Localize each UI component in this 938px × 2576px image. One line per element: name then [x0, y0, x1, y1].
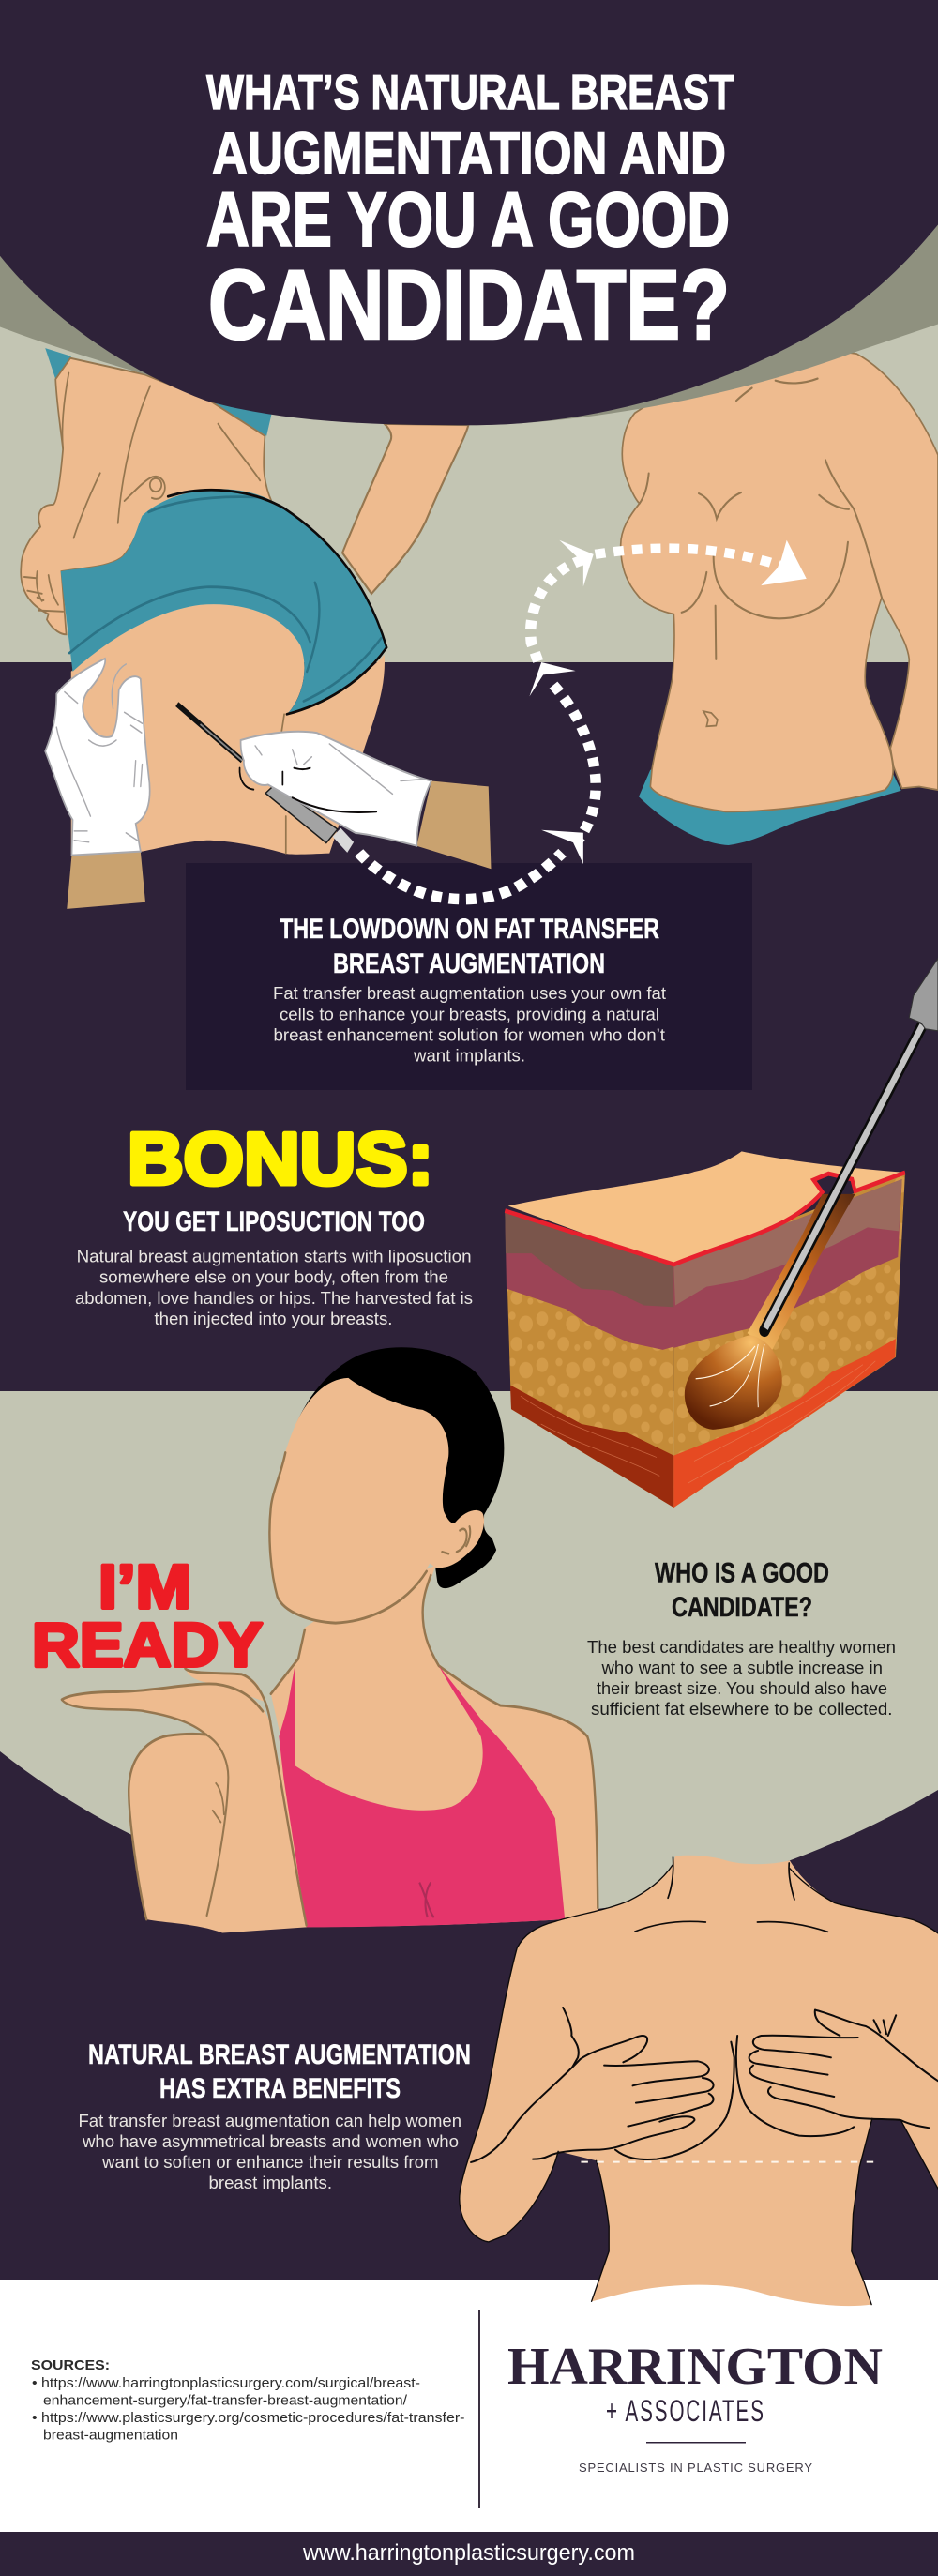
- left face dermis: [505, 1211, 675, 1307]
- heading: WHO IS A GOOD: [655, 1557, 829, 1589]
- cannula highlight: [201, 724, 242, 761]
- diagram: skin cross-section with cannula: [505, 959, 938, 1508]
- left face muscle layer: [505, 1211, 675, 1350]
- teal underwear: [61, 489, 386, 714]
- title: AUGMENTATION AND: [212, 121, 726, 187]
- pink top: [279, 1664, 565, 1927]
- dashed incision line: [581, 2159, 883, 2165]
- footer divider: [478, 2310, 480, 2508]
- body crease lines: [24, 373, 286, 854]
- title: WHAT’S NATURAL BREAST: [206, 66, 734, 120]
- body text: [79, 2112, 461, 2192]
- cannula: [177, 705, 242, 761]
- right face muscle layer: [673, 1179, 902, 1348]
- illustration: woman with pink top: [62, 1347, 598, 1933]
- background: light band with curved base: [0, 1391, 938, 1917]
- left glove: [45, 659, 150, 856]
- illustration: side figure lifting underwear: [21, 348, 491, 909]
- body text: somewhere else on your body, often from the: [99, 1268, 448, 1287]
- heading: BREAST AUGMENTATION: [333, 948, 605, 979]
- dotted segment across chest: [596, 549, 780, 566]
- title: [206, 66, 734, 360]
- hair: [292, 1347, 504, 1588]
- illustration: torso with hands: [460, 1856, 938, 2306]
- left glove wrist: [67, 852, 145, 909]
- source list: • https://www.harringtonplasticsurgery.com/surgical/breast-: [32, 2375, 420, 2391]
- white footer panel: [0, 2280, 938, 2532]
- logo name: HARRINGTON: [507, 2338, 883, 2396]
- top cleavage mark: [419, 1883, 434, 1917]
- source list: breast-augmentation: [43, 2428, 178, 2443]
- dotted segment upper: [531, 560, 583, 662]
- body text: Natural breast augmentation starts with liposuction: [77, 1248, 472, 1266]
- panel: lowdown box: [186, 863, 752, 1090]
- body text: Fat transfer breast augmentation uses your own fat: [273, 984, 666, 1003]
- skin: [460, 1856, 938, 2306]
- glow around cannula: [748, 1194, 855, 1350]
- logo tagline: SPECIALISTS IN PLASTIC SURGERY: [579, 2461, 812, 2475]
- right glove wrist: [416, 781, 491, 869]
- heading: NATURAL BREAST AUGMENTATION: [88, 2039, 471, 2070]
- text: sources: [31, 2357, 465, 2443]
- torso and arm skin: [621, 338, 938, 811]
- far arm: [342, 424, 468, 594]
- logo: Harrington + Associates: [507, 2338, 883, 2475]
- dotted segment bottom: [359, 853, 563, 900]
- thumb: [185, 1669, 265, 1702]
- right glove folds: [255, 744, 423, 794]
- teal strap left: [45, 348, 71, 379]
- teal strap right: [210, 401, 272, 436]
- website url: www.harringtonplasticsurgery.com: [302, 2540, 635, 2566]
- body text: abdomen, love handles or hips. The harvested fat is: [75, 1289, 473, 1308]
- ear detail: [442, 1526, 470, 1553]
- illustration: front torso: [621, 338, 938, 845]
- body text: sufficient fat elsewhere to be collected.: [591, 1700, 893, 1719]
- text: bonus: [75, 1117, 473, 1328]
- body text: [587, 1638, 896, 1719]
- body text: breast implants.: [208, 2174, 332, 2192]
- source list: [32, 2375, 465, 2443]
- lower body: [71, 604, 385, 855]
- arm outlines: [62, 1669, 307, 1925]
- background: light band top: [0, 188, 938, 662]
- arrowhead: [761, 540, 807, 585]
- dotted segment right: [553, 685, 596, 841]
- body text: want implants.: [413, 1047, 525, 1066]
- title: CANDIDATE?: [208, 250, 730, 360]
- star marker top: [559, 540, 594, 586]
- tissue strands: [521, 1361, 875, 1483]
- body text: [273, 984, 666, 1066]
- text: I'm ready: I’M: [98, 1552, 191, 1621]
- underwear seams: [69, 497, 381, 701]
- body text: then injected into your breasts.: [154, 1310, 392, 1328]
- fat bulb streaks: [696, 1344, 764, 1407]
- logo rule: [646, 2442, 746, 2443]
- text: extra benefits: [79, 2039, 471, 2192]
- right face fat: [673, 1173, 905, 1508]
- body text: breast enhancement solution for women who don’t: [274, 1026, 665, 1045]
- body text: who have asymmetrical breasts and women who: [82, 2132, 459, 2151]
- fat bulb: [685, 1335, 782, 1430]
- cannula shine: [765, 1025, 922, 1328]
- neck and collar lines: [635, 1857, 827, 1932]
- subheading: YOU GET LIPOSUCTION TOO: [123, 1206, 425, 1237]
- bonus heading: BONUS:: [128, 1117, 433, 1200]
- title dark ellipse: [0, 0, 938, 425]
- skin top surface: [508, 1151, 905, 1266]
- upper torso: [21, 358, 271, 634]
- handle: [909, 959, 938, 1031]
- heading: THE LOWDOWN ON FAT TRANSFER: [280, 914, 659, 945]
- body text: want to soften or enhance their results from: [101, 2153, 439, 2172]
- face and ear: [269, 1378, 484, 1623]
- left face bottom tissue: [510, 1385, 673, 1508]
- body text: The best candidates are healthy women: [587, 1638, 896, 1657]
- right face bottom tissue: [673, 1339, 896, 1508]
- right face dermis: [673, 1179, 902, 1305]
- title shadow band: [0, 224, 938, 425]
- sources heading: SOURCES:: [31, 2357, 110, 2373]
- text: lowdown: [273, 914, 666, 1066]
- star marker middle: [529, 662, 576, 696]
- syringe tip: [333, 828, 354, 853]
- cannula body: [764, 1025, 922, 1330]
- left glove folds: [56, 664, 143, 842]
- torso skin: [271, 1566, 598, 1927]
- right glove black folds: [239, 768, 376, 812]
- body text: who want to see a subtle increase in: [600, 1659, 883, 1677]
- heading: CANDIDATE?: [672, 1592, 812, 1623]
- website bar: [0, 2532, 938, 2576]
- raised arm and hand: [62, 1684, 307, 1933]
- text: who is a good candidate: [587, 1557, 896, 1719]
- source list: enhancement-surgery/fat-transfer-breast-augmentation/: [43, 2392, 408, 2409]
- body text: cells to enhance your breasts, providing a natural: [280, 1006, 659, 1024]
- underwear black edge: [168, 490, 386, 714]
- heading: [280, 914, 659, 979]
- right glove: [241, 732, 431, 846]
- left face fat: [505, 1211, 673, 1508]
- syringe handle: [265, 784, 338, 843]
- logo associates: + ASSOCIATES: [606, 2394, 765, 2428]
- face outline: [269, 1453, 427, 1623]
- left hand lines: [471, 2008, 734, 2162]
- text: I'm ready: READY: [32, 1610, 263, 1679]
- red skin edge: [505, 1173, 905, 1265]
- body text: Fat transfer breast augmentation can help women: [79, 2112, 461, 2130]
- text: I'm ready: [32, 1552, 263, 1679]
- body text: [75, 1248, 473, 1328]
- arrow: dotted transfer arrow from hip to breast: [359, 540, 807, 900]
- star marker bottom: [541, 830, 583, 864]
- body text: their breast size. You should also have: [597, 1679, 887, 1698]
- heading: [88, 2039, 471, 2104]
- outer outline: [460, 1865, 938, 2305]
- source list: • https://www.plasticsurgery.org/cosmetic-procedures/fat-transfer-: [32, 2410, 465, 2426]
- heading: HAS EXTRA BENEFITS: [159, 2073, 401, 2104]
- right hand lines: [736, 2010, 938, 2136]
- heading: [655, 1557, 829, 1623]
- torso outlines: [271, 1575, 598, 1908]
- title: ARE YOU A GOOD: [206, 177, 730, 263]
- teal underwear front: [639, 770, 901, 845]
- torso lines: [640, 379, 882, 726]
